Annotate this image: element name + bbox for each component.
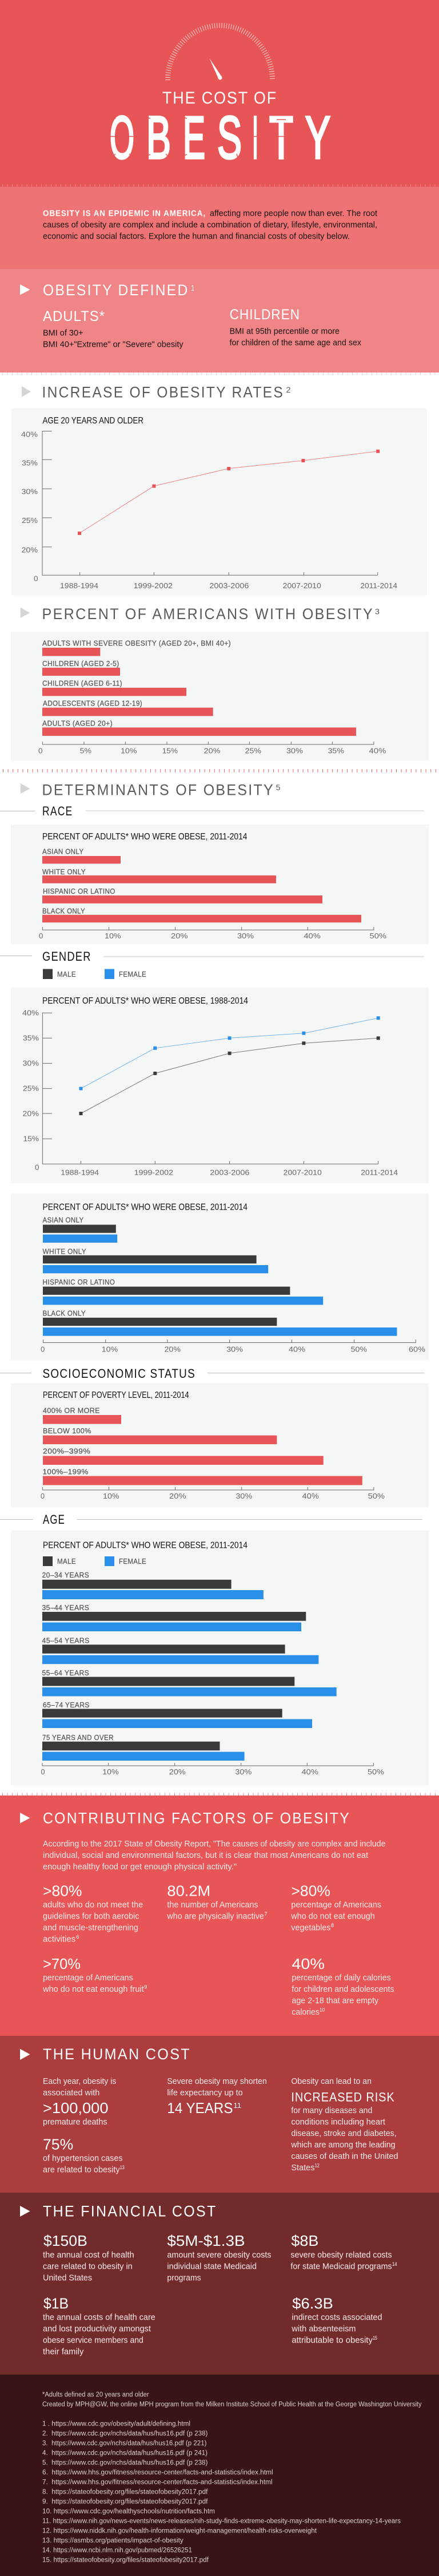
intro text: OBESITY IS AN EPIDEMIC IN AMERICA,	[43, 209, 206, 219]
axis: 0	[38, 747, 42, 755]
bars: BLACK ONLY	[42, 1309, 86, 1318]
intro text: economic and social factors. Explore the human and financial costs of obesity below.	[43, 231, 350, 241]
stat: increased risk: disease, stroke and diabetes,	[291, 2129, 397, 2138]
axes: 40%	[22, 1009, 39, 1017]
stat: life expectancy: 14 YEARS	[167, 2101, 233, 2117]
axes: 2003-2006	[210, 1168, 249, 1176]
axes: 1999-2002	[134, 582, 173, 590]
title: obesity: S	[217, 104, 242, 172]
stat: fruit: percentage of Americans	[43, 1973, 133, 1983]
sources list: 3. https://www.cdc.gov/nchs/data/hus/hus16.pdf (p 221)	[42, 2440, 207, 2447]
axis	[41, 1339, 425, 1354]
sources list: 11. https://www.nih.gov/news-events/news-releases/nih-study-finds-extreme-obesity-may-shorten-life-expectancy-14-years	[42, 2518, 401, 2525]
axis: 5%	[80, 747, 91, 755]
title: obesity: O	[110, 104, 134, 172]
stat: state medicaid range: $5M-$1.3B	[167, 2233, 245, 2249]
axes: 1999-2002	[134, 1168, 173, 1176]
axis: 40%	[302, 1492, 319, 1500]
axes: 2007-2010	[284, 1168, 322, 1176]
axis: 0	[41, 1346, 45, 1354]
stat: empty calories: calories	[292, 2007, 320, 2017]
axes: 0	[35, 1164, 39, 1172]
header panel	[0, 0, 439, 187]
heading: increase of obesity rates: INCREASE OF OBESITY RATES	[42, 383, 284, 401]
axis	[38, 742, 386, 755]
panel: the financial cost	[0, 2193, 439, 2375]
axis: 10%	[102, 1346, 118, 1354]
chart title: PERCENT OF ADULTS* WHO WERE OBESE, 2011-2014	[43, 1540, 248, 1550]
adults definition: BMI of 30+	[43, 328, 83, 338]
axis: 10%	[102, 1768, 119, 1776]
legend: male female	[43, 1556, 146, 1566]
heading: the human cost: THE HUMAN COST	[43, 2046, 191, 2063]
title: the cost of: THE COST OF	[162, 89, 277, 108]
stat: life expectancy: 11	[233, 2101, 241, 2110]
icon: arrow	[20, 2206, 30, 2217]
stat: physically inactive: 80.2M	[167, 1884, 210, 1900]
heading: the financial cost: THE FINANCIAL COST	[43, 2202, 217, 2220]
data line	[78, 450, 380, 535]
sources list: 13. https://asmbs.org/patients/impact-of-obesity	[42, 2538, 183, 2545]
sources list: 5. https://www.cdc.gov/nchs/data/hus/hus16.pdf (p 238)	[42, 2460, 208, 2467]
chart title: AGE 20 YEARS AND OLDER	[42, 416, 143, 426]
panel: gender line chart	[11, 988, 429, 1184]
stat: medicaid total: severe obesity related costs	[290, 2250, 392, 2260]
icon: arrow	[21, 608, 30, 618]
bars: 75 YEARS AND OVER	[42, 1733, 114, 1742]
intro text	[43, 208, 378, 241]
axis	[41, 1763, 384, 1776]
bars: CHILDREN (AGED 6-11)	[42, 679, 122, 687]
legend: male female	[43, 969, 146, 979]
axis: 10%	[103, 1492, 119, 1500]
sources list: 2. https://www.cdc.gov/nchs/data/hus/hus16.pdf (p 238)	[42, 2431, 208, 2438]
stat: annual health care cost: United States	[43, 2273, 92, 2282]
footnote 2: 2	[286, 385, 291, 394]
intro panel	[0, 187, 439, 270]
axes: 2011-2014	[361, 1168, 398, 1176]
stat: increased risk: which are among the leading	[290, 2140, 396, 2150]
footnote 1: 1	[191, 283, 194, 292]
axis	[39, 927, 386, 940]
credits: Created by MPH@GW, the online MPH program from the Milken Institute School of Public Health at the George Washington University	[42, 2401, 422, 2408]
stat: state medicaid range	[167, 2233, 272, 2282]
sources list	[42, 2421, 401, 2564]
axis: 40%	[289, 1346, 305, 1354]
stat: vegetables	[290, 1884, 381, 1933]
stat: medicaid total: for state Medicaid programs	[290, 2261, 392, 2271]
bars	[42, 639, 356, 736]
sources list: 15. https://stateofobesity.org/files/stateofobesity2017.pdf	[42, 2557, 209, 2564]
stat: increased risk: for many diseases and	[291, 2106, 372, 2115]
children definition: for children of the same age and sex	[230, 338, 361, 348]
stat: service members: $1B	[43, 2296, 69, 2312]
stat: service members: and lost productivity amongst	[43, 2324, 151, 2334]
stat: state medicaid range: programs	[167, 2273, 201, 2282]
stat: annual health care cost	[43, 2233, 134, 2282]
stat: adults guidelines: >80%	[43, 1884, 82, 1900]
bars: WHITE ONLY	[42, 867, 86, 876]
stat: hypertension: 75%	[43, 2137, 73, 2153]
stat: increased risk	[290, 2076, 398, 2173]
stat: empty calories	[292, 1956, 394, 2017]
axis	[41, 1487, 385, 1500]
intro text: affecting more people now than ever. The root	[210, 208, 378, 219]
stat: annual health care cost: care related to obesity in	[43, 2261, 133, 2271]
stat: fruit: >70%	[43, 1956, 81, 1972]
bars: BELOW 100%	[43, 1426, 91, 1435]
axes: 20%	[23, 1110, 39, 1118]
axis: 10%	[121, 747, 137, 755]
stat: empty calories: percentage of daily calories	[292, 1973, 391, 1983]
credits	[42, 2392, 422, 2408]
stat: annual health care cost: the annual cost of health	[43, 2250, 134, 2260]
children definition: CHILDREN	[230, 307, 300, 323]
sources list: 7. https://www.hhs.gov/fitness/resource-center/facts-and-statistics/index.html	[42, 2479, 273, 2486]
stat: premature deaths: premature deaths	[43, 2117, 107, 2127]
axis: 30%	[236, 1492, 252, 1500]
bars: HISPANIC OR LATINO	[42, 1278, 115, 1286]
axis: 50%	[369, 932, 386, 940]
bars	[42, 847, 361, 922]
stat: fruit	[42, 1956, 147, 1994]
children definition: BMI at 95th percentile or more	[230, 326, 340, 336]
heading: determinants of obesity: DETERMINANTS OF OBESITY	[42, 781, 274, 798]
children definition	[230, 307, 361, 348]
bars: 20–34 YEARS	[42, 1571, 89, 1579]
sources list: 1 . https://www.cdc.gov/obesity/adult/defining.html	[42, 2421, 190, 2428]
bars: ADULTS WITH SEVERE OBESITY (AGED 20+, BMI 40+)	[42, 639, 231, 648]
stat: increased risk: causes of death in the United	[291, 2151, 398, 2161]
bars	[42, 1571, 337, 1761]
axis: 60%	[409, 1346, 425, 1354]
stat: increased risk: conditions including heart	[291, 2117, 386, 2127]
stat: service members: the annual costs of health care	[43, 2313, 155, 2323]
axis: 20%	[165, 1346, 181, 1354]
title: obesity: E	[183, 104, 205, 172]
bars: 400% OR MORE	[43, 1406, 100, 1414]
axis: 30%	[226, 1346, 243, 1354]
stat: hypertension	[43, 2137, 125, 2175]
stat: vegetables: who do not eat enough	[290, 1911, 375, 1921]
panel: race bar chart	[11, 825, 429, 944]
icon: arrow	[20, 284, 30, 295]
stat: service members: their family	[43, 2347, 84, 2357]
adults definition: BMI 40+"Extreme" or "Severe" obesity	[43, 340, 183, 349]
panel: the human cost	[0, 2036, 439, 2193]
axes: 0	[34, 574, 38, 582]
stat: life expectancy: life expectancy up to	[167, 2088, 243, 2098]
title: obesity: I	[252, 104, 258, 172]
stat: increased risk: INCREASED RISK	[291, 2090, 395, 2105]
intro text: causes of obesity are complex and include a combination of dietary, lifestyle, environmental,	[43, 220, 377, 230]
sources list: 9. https://stateofobesity.org/files/stateofobesity2017.pdf	[42, 2499, 208, 2506]
axes: 2007-2010	[283, 582, 321, 590]
icon: scale gauge	[168, 26, 272, 80]
axis: 35%	[328, 747, 344, 755]
icon: arrow	[22, 386, 31, 397]
bars: ASIAN ONLY	[42, 847, 83, 856]
quote text: According to the 2017 State of Obesity Report, "The causes of obesity are complex and include	[43, 1839, 385, 1849]
stat: absenteeism: $6.3B	[292, 2296, 333, 2312]
sources list: 4. https://www.cdc.gov/nchs/data/hus/hus16.pdf (p 241)	[42, 2450, 207, 2457]
sources list: 12. https://www.niddk.nih.gov/health-information/weight-management/health-risks-overweight	[42, 2528, 317, 2535]
axis: 15%	[162, 747, 178, 755]
chart title: PERCENT OF ADULTS* WHO WERE OBESE, 2011-2014	[42, 1203, 248, 1212]
stat: hypertension: of hypertension cases	[43, 2154, 122, 2163]
subheading: gender: GENDER	[42, 949, 91, 964]
bars: CHILDREN (AGED 2-5)	[42, 659, 119, 668]
axes: 35%	[23, 1034, 39, 1042]
panel: age bar chart	[11, 1531, 429, 1785]
chart title: PERCENT OF POVERTY LEVEL, 2011-2014	[43, 1390, 189, 1400]
bars	[42, 1216, 397, 1336]
panel: gender by race bar chart	[11, 1194, 429, 1360]
stat: medicaid total: $8B	[291, 2233, 318, 2249]
stat: absenteeism: indirect costs associated	[292, 2313, 382, 2323]
axis: 20%	[204, 747, 221, 755]
stat: vegetables: percentage of Americans	[291, 1900, 381, 1910]
stat: life expectancy: Severe obesity may shorten	[167, 2076, 267, 2086]
stat: vegetables: vegetables	[291, 1923, 330, 1933]
axes: 1988-1994	[60, 582, 98, 590]
bars: 200%–399%	[43, 1446, 90, 1455]
axis: 20%	[171, 932, 188, 940]
subheading: socioeconomic status: SOCIOECONOMIC STATUS	[42, 1366, 195, 1381]
axes: 35%	[22, 459, 38, 467]
bars: 45–54 YEARS	[42, 1636, 90, 1644]
stat: adults guidelines: adults who do not meet the	[43, 1900, 143, 1910]
stat: empty calories: age 2-18 that are empty	[292, 1996, 379, 2006]
axes: 30%	[23, 1060, 39, 1068]
stat: life expectancy	[167, 2076, 267, 2117]
axis: 40%	[369, 747, 386, 755]
axes: 2003-2006	[209, 582, 249, 590]
axes: 20%	[22, 546, 38, 554]
female line	[79, 1016, 380, 1090]
quote text: enough healthy food or get enough physical activity."	[43, 1862, 237, 1872]
stat: increased risk: States	[291, 2163, 314, 2173]
bars	[42, 1406, 362, 1485]
axes: 15%	[23, 1135, 39, 1143]
panel: footer	[0, 2375, 439, 2576]
legend: male female: MALE	[57, 1557, 76, 1566]
stat: physically inactive	[166, 1884, 268, 1921]
stat: service members: obese service members and	[43, 2336, 143, 2345]
quote text: individual, social and environmental factors, but it is clear that most Americans do not eat	[43, 1850, 369, 1860]
credits: *Adults defined as 20 years and older	[42, 2392, 149, 2399]
stat: fruit: 9	[144, 1984, 147, 1990]
stat: adults guidelines: 6	[76, 1934, 79, 1940]
axis: 10%	[105, 932, 121, 940]
title: obesity: Y	[305, 104, 330, 172]
stat: absenteeism: 15	[373, 2335, 377, 2341]
footnote 3: 3	[375, 607, 380, 616]
bars: 55–64 YEARS	[42, 1669, 89, 1677]
stat: increased risk: Obesity can lead to an	[291, 2076, 372, 2086]
axes: 1988-1994	[61, 1168, 99, 1176]
stat: vegetables: >80%	[291, 1884, 330, 1900]
legend: male female: FEMALE	[119, 1557, 146, 1566]
axes: 25%	[22, 517, 38, 525]
stat: adults guidelines: guidelines for both aerobic	[43, 1911, 139, 1921]
stat: absenteeism: attributable to obesity	[292, 2336, 373, 2345]
quote text	[43, 1839, 385, 1872]
legend: male female: FEMALE	[119, 970, 146, 978]
stat: absenteeism: with absenteeism	[291, 2324, 356, 2334]
bars: ADULTS (AGED 20+)	[42, 719, 113, 728]
axis: 20%	[169, 1492, 186, 1500]
male line	[79, 1036, 380, 1115]
axes: 2011-2014	[360, 582, 397, 590]
stat: physically inactive: 7	[264, 1911, 268, 1917]
title: obesity: T	[269, 104, 293, 172]
axis: 0	[39, 932, 43, 940]
subheading: age: AGE	[43, 1512, 65, 1527]
stat: empty calories: 40%	[292, 1956, 325, 1972]
bars: 35–44 YEARS	[42, 1603, 89, 1612]
axis: 25%	[245, 747, 261, 755]
stat: increased risk: 12	[315, 2163, 320, 2169]
panel: contributing factors	[0, 1796, 439, 2036]
heading: contributing factors of obesity: CONTRIBUTING FACTORS OF OBESITY	[43, 1809, 350, 1826]
stat: hypertension: 13	[120, 2165, 125, 2170]
axis: 30%	[237, 932, 254, 940]
stat: premature deaths: >100,000	[43, 2101, 109, 2117]
stat: premature deaths: Each year, obesity is	[43, 2076, 116, 2086]
stat: vegetables: 8	[331, 1923, 334, 1928]
axis: 40%	[302, 1768, 318, 1776]
sources list: 8. https://stateofobesity.org/files/stateofobesity2017.pdf	[42, 2489, 208, 2496]
stat: empty calories: 10	[320, 2007, 325, 2012]
icon: arrow	[20, 2049, 30, 2060]
bars: ADOLESCENTS (AGED 12-19)	[43, 699, 142, 707]
stat: annual health care cost: $150B	[43, 2233, 87, 2249]
stat: empty calories: for children and adolescents	[292, 1984, 394, 1994]
axis: 20%	[169, 1768, 186, 1776]
heading: obesity defined: OBESITY DEFINED	[43, 282, 189, 299]
axis: 30%	[235, 1768, 252, 1776]
footnote 5: 5	[276, 783, 281, 792]
sources list: 6. https://www.hhs.gov/fitness/resource-center/facts-and-statistics/index.html	[42, 2470, 273, 2476]
bars: ASIAN ONLY	[42, 1216, 83, 1224]
icon: arrow	[20, 1813, 30, 1823]
adults definition	[43, 308, 183, 349]
stat: physically inactive: the number of Americans	[167, 1900, 258, 1910]
axis: 50%	[368, 1768, 384, 1776]
axes	[21, 430, 397, 590]
panel: bar chart americans with obesity	[11, 632, 429, 760]
stat: premature deaths: associated with	[43, 2088, 99, 2098]
subheading: race: RACE	[42, 804, 73, 818]
panel: poverty level bar chart	[11, 1384, 429, 1507]
axis: 50%	[368, 1492, 385, 1500]
axis: 40%	[304, 932, 321, 940]
bars: 100%–199%	[42, 1468, 89, 1476]
icon: arrow	[21, 783, 30, 794]
axis: 0	[41, 1492, 45, 1500]
axis: 0	[41, 1768, 45, 1776]
panel: obesity defined	[0, 270, 439, 372]
stat: adults guidelines: activities	[43, 1934, 75, 1944]
adults definition: ADULTS*	[43, 308, 105, 324]
stat: adults guidelines	[43, 1884, 143, 1944]
bars: WHITE ONLY	[42, 1247, 86, 1255]
panel: line chart age 20 and older	[11, 409, 427, 595]
bars: HISPANIC OR LATINO	[43, 887, 115, 895]
bars: 65–74 YEARS	[43, 1701, 90, 1709]
stat: medicaid total	[290, 2233, 397, 2271]
title: obesity: B	[146, 104, 171, 172]
chart title: PERCENT OF ADULTS* WHO WERE OBESE, 2011-2014	[42, 832, 248, 842]
bars: BLACK ONLY	[42, 906, 85, 915]
stat: physically inactive: who are physically inactive	[166, 1911, 264, 1921]
heading: percent of americans with obesity: PERCENT OF AMERICANS WITH OBESITY	[42, 605, 374, 623]
stat: premature deaths	[43, 2076, 116, 2127]
axes	[22, 1009, 398, 1176]
stat: hypertension: are related to obesity	[43, 2165, 120, 2175]
stat: medicaid total: 14	[392, 2261, 397, 2267]
axes: 40%	[21, 430, 38, 438]
stat: state medicaid range: individual state Medicaid	[167, 2261, 257, 2271]
stat: state medicaid range: amount severe obesity costs	[167, 2250, 272, 2260]
stat: service members	[43, 2296, 155, 2357]
axes: 25%	[23, 1085, 39, 1093]
axis: 30%	[286, 747, 303, 755]
axis: 50%	[351, 1346, 367, 1354]
stat: fruit: who do not eat enough fruit	[42, 1984, 145, 1994]
legend: male female: MALE	[57, 970, 76, 978]
sources list: 14. https://www.ncbi.nlm.nih.gov/pubmed/26526251	[42, 2547, 192, 2554]
sources list: 10. https://www.cdc.gov/healthyschools/nutrition/facts.htm	[42, 2508, 215, 2515]
stat: adults guidelines: and muscle-strengthening	[43, 1923, 138, 1933]
axes: 30%	[22, 488, 38, 496]
stat: absenteeism	[291, 2296, 382, 2345]
chart title: PERCENT OF ADULTS* WHO WERE OBESE, 1988-2014	[42, 996, 248, 1006]
